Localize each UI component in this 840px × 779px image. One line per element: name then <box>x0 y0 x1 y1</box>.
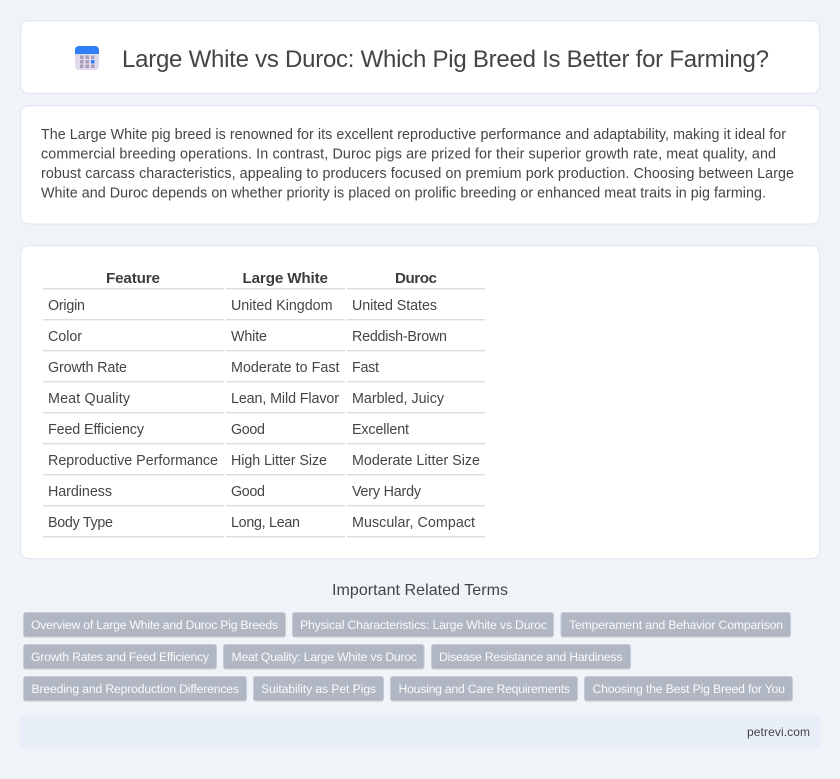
tag <box>254 676 384 701</box>
row: reproductive performance: Moderate Litter Size <box>352 453 480 469</box>
row: feed efficiency <box>43 422 485 444</box>
row: growth rate: Growth Rate <box>48 360 127 376</box>
intro paragraph: The Large White pig breed is renowned for its excellent reproductive performance and adaptability, making it ideal for <box>41 127 786 143</box>
row: hardiness: Good <box>231 484 265 500</box>
row: origin: Origin <box>48 298 85 314</box>
footer source: petrevi.com <box>747 725 810 739</box>
tag <box>224 644 424 669</box>
tag <box>24 644 216 669</box>
row: reproductive performance: High Litter Size <box>231 453 327 469</box>
row: origin <box>43 298 485 320</box>
row: meat quality: Lean, Mild Flavor <box>231 391 339 407</box>
row: hardiness: Hardiness <box>48 484 112 500</box>
row: growth rate: Fast <box>352 360 379 376</box>
table header <box>43 270 485 289</box>
footer bar <box>20 715 820 749</box>
tag <box>24 676 246 701</box>
tag: Physical Characteristics: Large White vs Duroc <box>300 618 547 632</box>
row: meat quality: Meat Quality <box>48 391 131 407</box>
row: reproductive performance <box>43 453 485 475</box>
row: meat quality: Marbled, Juicy <box>352 391 445 407</box>
tag: Housing and Care Requirements <box>398 682 570 696</box>
row: body type: Long, Lean <box>231 515 300 531</box>
row: body type: Body Type <box>48 515 113 531</box>
tag <box>561 612 790 637</box>
tag <box>584 676 792 701</box>
intro paragraph: robust carcass characteristics, appealing to producers focused on premium pork production. Choosing between Large <box>41 166 794 182</box>
title: Large White vs Duroc: Which Pig Breed Is Better for Farming? <box>122 46 769 73</box>
row: origin: United States <box>352 298 437 314</box>
tag: Overview of Large White and Duroc Pig Breeds <box>31 618 278 632</box>
tag <box>432 644 630 669</box>
tag: Temperament and Behavior Comparison <box>569 618 783 632</box>
row: body type <box>43 515 485 537</box>
row: color: Reddish-Brown <box>352 329 447 345</box>
tag: Meat Quality: Large White vs Duroc <box>232 650 417 664</box>
tag: Choosing the Best Pig Breed for You <box>592 682 785 696</box>
row: color <box>43 329 485 351</box>
row: growth rate <box>43 360 485 382</box>
intro paragraph <box>41 127 794 202</box>
row: feed efficiency: Excellent <box>352 422 409 438</box>
related term tags <box>24 612 792 701</box>
row: reproductive performance: Reproductive Performance <box>48 453 218 469</box>
icon: calendar <box>75 46 99 70</box>
table header: Feature <box>106 270 160 287</box>
table header: Duroc <box>395 270 437 287</box>
table header: Large White <box>242 270 328 287</box>
row: hardiness <box>43 484 485 506</box>
row: meat quality <box>43 391 485 413</box>
tag: Suitability as Pet Pigs <box>261 682 376 696</box>
intro paragraph: White and Duroc depends on whether priority is placed on prolific breeding or enhanced meat traits in pig farming. <box>41 186 766 202</box>
row: growth rate: Moderate to Fast <box>231 360 340 376</box>
tag <box>390 676 578 701</box>
panel: title header <box>21 21 820 93</box>
panel: introduction <box>21 106 820 224</box>
tag <box>24 612 286 637</box>
tag: Growth Rates and Feed Efficiency <box>31 650 210 664</box>
tag: Disease Resistance and Hardiness <box>439 650 622 664</box>
row: feed efficiency: Good <box>231 422 265 438</box>
row: color: Color <box>48 329 82 345</box>
row: hardiness: Very Hardy <box>352 484 422 500</box>
row: color: White <box>231 329 267 345</box>
row: feed efficiency: Feed Efficiency <box>48 422 145 438</box>
row: body type: Muscular, Compact <box>352 515 475 531</box>
row: origin: United Kingdom <box>231 298 332 314</box>
intro paragraph: commercial breeding operations. In contrast, Duroc pigs are prized for their superior growth rate, meat quality, and <box>41 146 776 162</box>
heading: related terms: Important Related Terms <box>332 582 508 599</box>
tag <box>292 612 554 637</box>
panel: comparison table <box>21 246 820 559</box>
tag: Breeding and Reproduction Differences <box>32 682 239 696</box>
